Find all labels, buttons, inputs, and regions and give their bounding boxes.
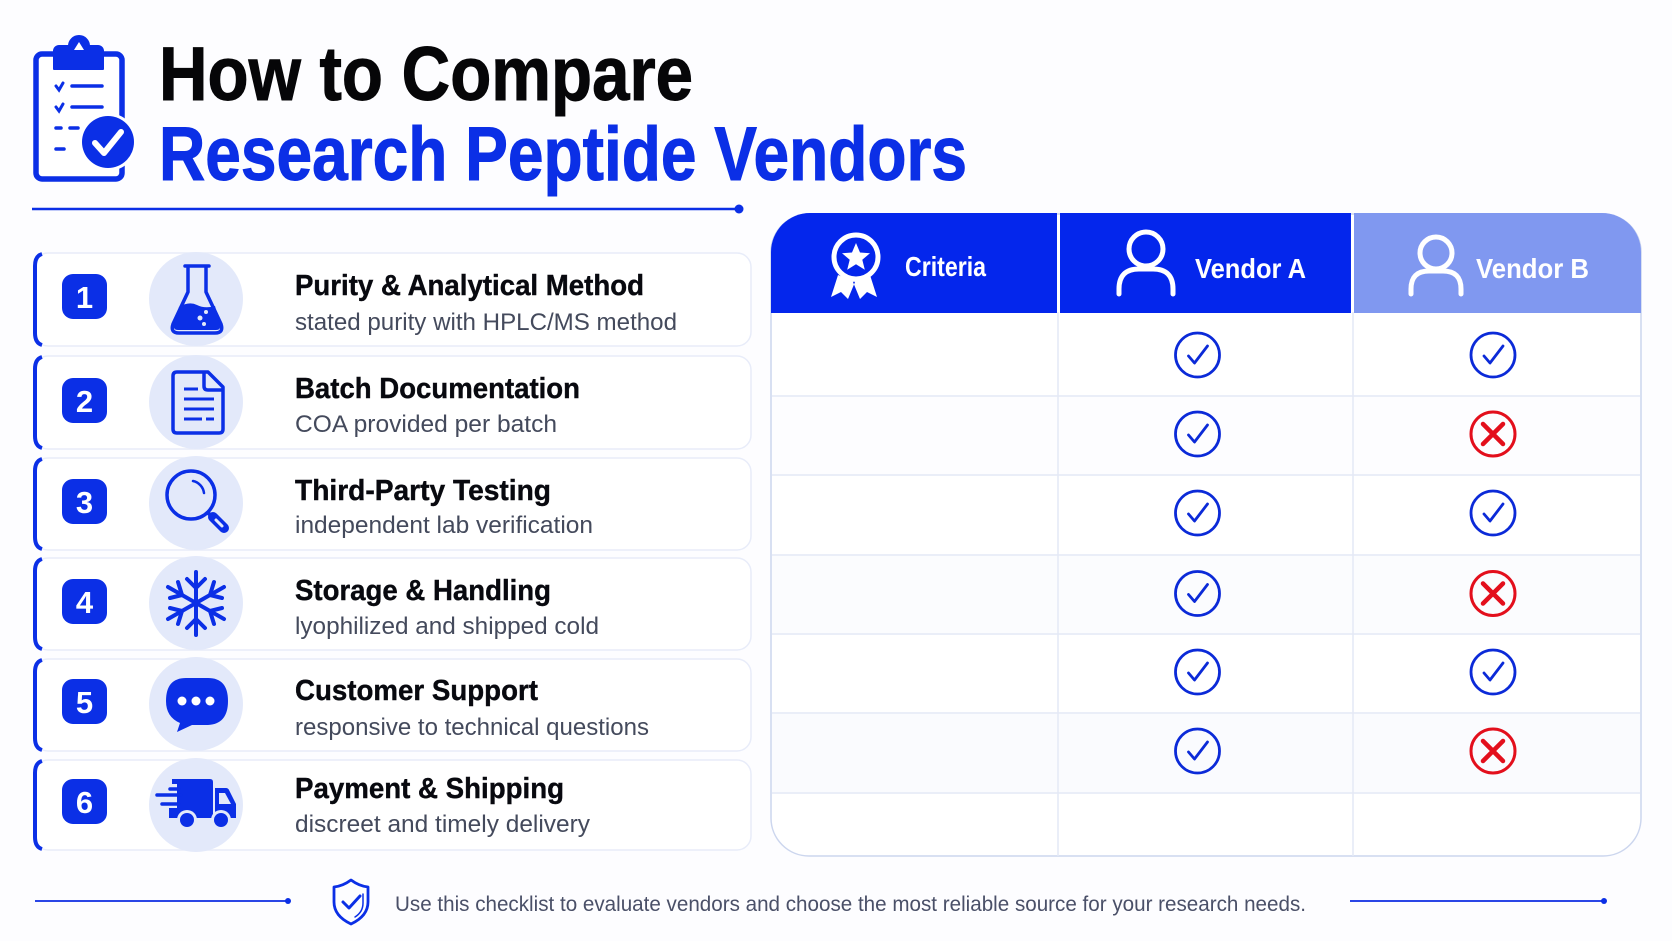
criterion 5: customer support: Customer Support [295,675,538,707]
table header: vendor A [1060,213,1351,313]
criterion 2: batch documentation [34,355,751,449]
criterion 6: payment: Payment & Shipping [295,773,564,805]
vendor B marks [1471,333,1515,773]
criterion 5: customer support: 5 [76,685,93,720]
criterion 3: third-party testing [34,456,751,550]
table header: criteria: Criteria [905,251,986,282]
table header: vendor A: Vendor A [1195,253,1306,284]
icon: person [1119,232,1173,294]
title: Research Peptide Vendors [159,112,967,197]
criterion 3: third-party testing: independent lab verification [295,512,593,539]
panel: comparison table [771,213,1641,856]
icon: magnifier [167,471,224,528]
criterion 4: storage: 4 [76,585,94,620]
criterion 6: payment: discreet and timely delivery [295,811,590,838]
criterion 5: customer support [34,657,751,751]
footer [35,880,1607,924]
title: How to Compare [159,32,693,117]
criterion 3: third-party testing: Third-Party Testing [295,475,551,507]
icon: chat bubble [166,678,228,732]
icon: document [173,372,223,433]
criterion 1: purity: stated purity with HPLC/MS method [295,309,677,336]
icon: clipboard checklist [36,36,137,179]
table header: criteria [771,213,1057,313]
footer note: Use this checklist to evaluate vendors and choose the most reliable source for your research needs. [395,893,1306,916]
criterion 1: purity [34,252,751,346]
title rule [32,204,744,214]
icon: flask [172,266,222,333]
criterion 5: customer support: responsive to technical questions [295,714,649,741]
criterion 4: storage: lyophilized and shipped cold [295,613,599,640]
criterion 6: payment: 6 [76,785,93,820]
criterion 1: purity: Purity & Analytical Method [295,270,644,302]
icon: award ribbon [831,235,878,299]
criterion 4: storage [34,556,751,650]
icon: delivery truck [157,779,236,830]
table header: vendor B [1354,213,1641,313]
icon: snowflake [168,572,224,635]
vendor A checks [1176,333,1220,773]
criterion 1: purity: 1 [76,280,93,315]
panel: criteria list [34,252,751,852]
criterion 2: batch documentation: 2 [76,384,93,419]
title [159,32,967,197]
table header: vendor B: Vendor B [1476,253,1589,284]
criterion 2: batch documentation: Batch Documentation [295,373,580,405]
icon: person [1411,237,1461,294]
criterion 2: batch documentation: COA provided per batch [295,411,557,438]
criterion 4: storage: Storage & Handling [295,575,551,607]
icon: shield check [334,880,368,924]
criterion 6: payment [34,758,751,852]
criterion 3: third-party testing: 3 [76,485,93,520]
